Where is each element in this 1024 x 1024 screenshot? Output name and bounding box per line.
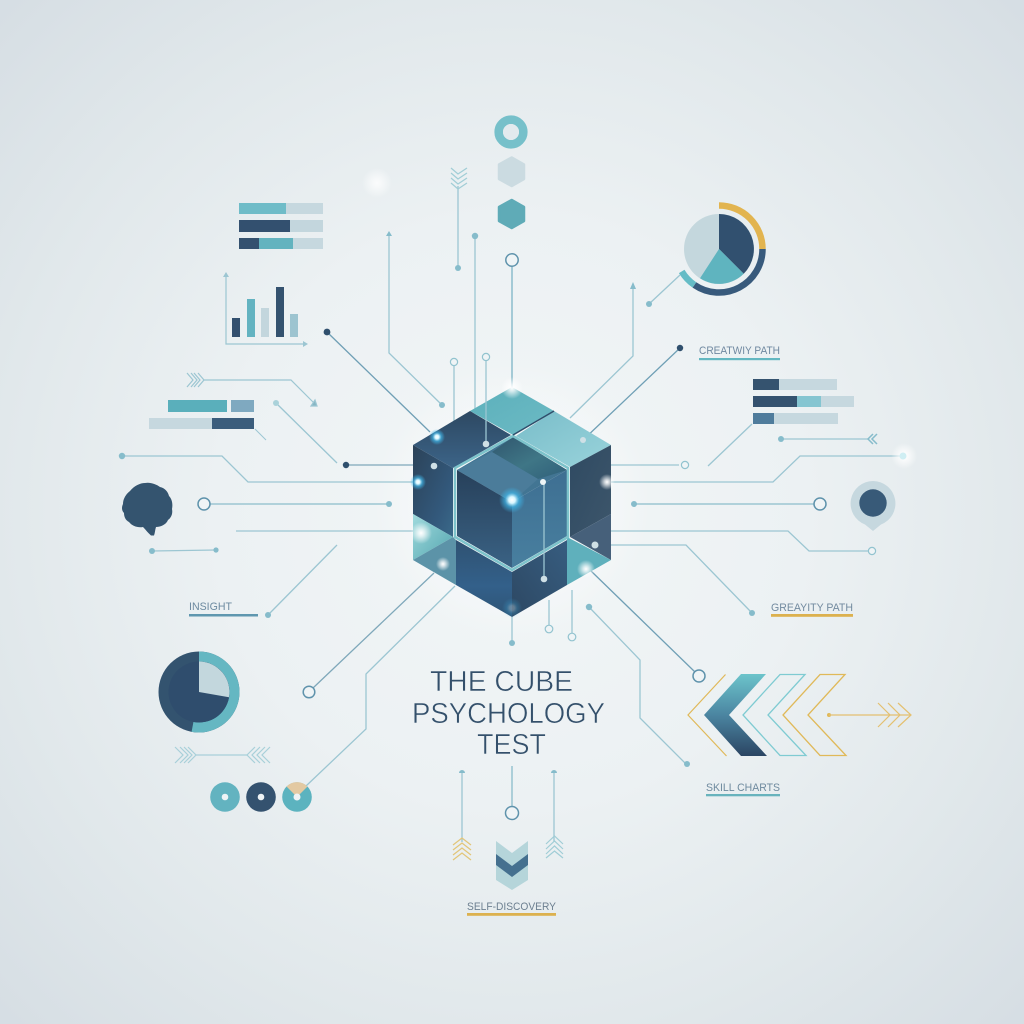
top line: dot stem — [474, 236, 476, 412]
chevron: gold outline — [783, 674, 846, 756]
cube: inner right face — [512, 470, 567, 568]
label: self-discovery: SELF-DISCOVERY — [467, 901, 557, 913]
cube: lower right teal face — [567, 537, 611, 585]
line: left short — [236, 530, 414, 532]
cube: top teal face — [470, 387, 554, 435]
pie: teal arc — [682, 271, 694, 285]
label: creativity path: CREATWIY PATH — [699, 345, 780, 357]
icon: location pin — [851, 481, 895, 531]
cube: inner top light face — [457, 452, 538, 502]
label: insight: INSIGHT — [189, 601, 232, 613]
lines: below cube — [512, 590, 572, 643]
line: bottom ring — [511, 766, 513, 806]
line: top right elbow — [570, 286, 633, 418]
arrow: right double chevron — [868, 434, 877, 444]
line: right ring — [634, 503, 814, 505]
cube: inner top backing — [457, 437, 567, 502]
line: right elbow ring — [611, 531, 868, 551]
bar chart: axes — [223, 272, 308, 347]
cube: inner hexagon edge — [455, 436, 568, 570]
icon: pale hexagon — [499, 158, 524, 186]
arrow: left elbow chevron — [187, 373, 317, 406]
arrow: double fletched lower left — [175, 747, 270, 763]
line nodes — [119, 231, 917, 820]
line: brain dots — [152, 550, 216, 551]
title: THE CUBE — [430, 666, 573, 698]
line: dark dot top left — [327, 332, 430, 432]
cube: centre glow — [499, 487, 525, 513]
chevron: filled gradient — [704, 674, 767, 756]
top line: centre ring stem — [511, 267, 513, 388]
cube — [410, 357, 615, 618]
line: lower-left elbow — [306, 586, 455, 786]
line: dark dot to cube — [346, 464, 434, 466]
cube: vertex glows — [410, 377, 615, 618]
line: lower-right elbow — [589, 607, 686, 764]
top line: ring stem left — [453, 366, 455, 430]
node: glowing end — [891, 443, 917, 469]
cube halo — [372, 362, 652, 642]
line: right elbow down — [595, 545, 752, 613]
pie: gold arc — [719, 206, 762, 249]
title — [412, 666, 605, 761]
cube: right dark face — [570, 445, 611, 537]
stacked bars: mid left — [149, 400, 266, 440]
lines: below title — [462, 771, 554, 842]
arrow: gold fletching bottom — [453, 838, 471, 860]
icon: bottom chevron badge — [496, 841, 528, 890]
line: bars connector — [708, 424, 752, 466]
pie chart: upper right — [682, 206, 762, 293]
stacked bars: top left — [239, 203, 323, 249]
line: pale dot — [276, 403, 337, 463]
glow: sparkle top left — [362, 168, 392, 198]
title: TEST — [477, 729, 546, 761]
arrow: gold — [827, 703, 911, 727]
title: PSYCHOLOGY — [412, 698, 605, 730]
donut chart: lower left — [158, 652, 240, 732]
icons: three circles — [210, 782, 312, 812]
cube: seam — [513, 411, 554, 435]
pie: wedges — [684, 214, 754, 284]
line: left ring — [204, 503, 389, 505]
chevron: teal outline — [743, 674, 806, 756]
line: lower-left ring — [313, 573, 434, 688]
nodes: small filled dots — [119, 231, 784, 773]
label: greayity path: GREAYITY PATH — [771, 602, 853, 614]
line: pie connector — [649, 275, 680, 304]
top line: elbow — [389, 234, 442, 405]
bar chart — [223, 272, 308, 347]
cube: bottom left face — [456, 540, 512, 617]
cube: bottom right face — [512, 540, 567, 617]
cube: right lower dark face — [570, 514, 611, 560]
top line: fletched arrow — [457, 186, 459, 268]
line: chevron dot right — [781, 438, 868, 440]
cube: node dots — [431, 357, 598, 582]
bar chart: bars — [232, 287, 298, 337]
cube: left dark face — [413, 445, 453, 537]
icon: brain — [122, 483, 172, 536]
label: insight — [189, 601, 258, 616]
line: right ring short — [611, 464, 679, 466]
cube: top light face — [516, 411, 611, 467]
pie: dark arc — [694, 249, 762, 293]
icon: teal ring — [499, 120, 523, 144]
stacked bars: right — [753, 379, 854, 424]
label: skill charts: SKILL CHARTS — [706, 782, 780, 794]
cube: upper left dark face — [413, 411, 511, 468]
chevron arrows: lower right — [688, 674, 911, 756]
nodes: pale rings — [450, 353, 876, 641]
cube: inner left face — [457, 470, 512, 568]
line: lower-right ring — [590, 570, 695, 672]
nodes: rings — [198, 254, 826, 820]
cube: inner top dark face — [492, 437, 567, 479]
line: left elbow — [122, 456, 414, 482]
line: right glow elbow — [611, 456, 902, 482]
top icon stack — [499, 120, 524, 228]
cube: lower left face — [413, 537, 456, 585]
circuit lines — [122, 186, 902, 842]
line: creativity dot — [583, 348, 680, 440]
arrow: top fletching — [451, 168, 467, 189]
arrow: teal fletching bottom — [546, 836, 563, 858]
icon: teal hexagon — [499, 200, 524, 228]
cube: left light face — [413, 514, 453, 560]
nodes: dark dots — [324, 329, 683, 468]
line: insight — [268, 545, 337, 615]
chevron: thin gold — [688, 674, 726, 756]
